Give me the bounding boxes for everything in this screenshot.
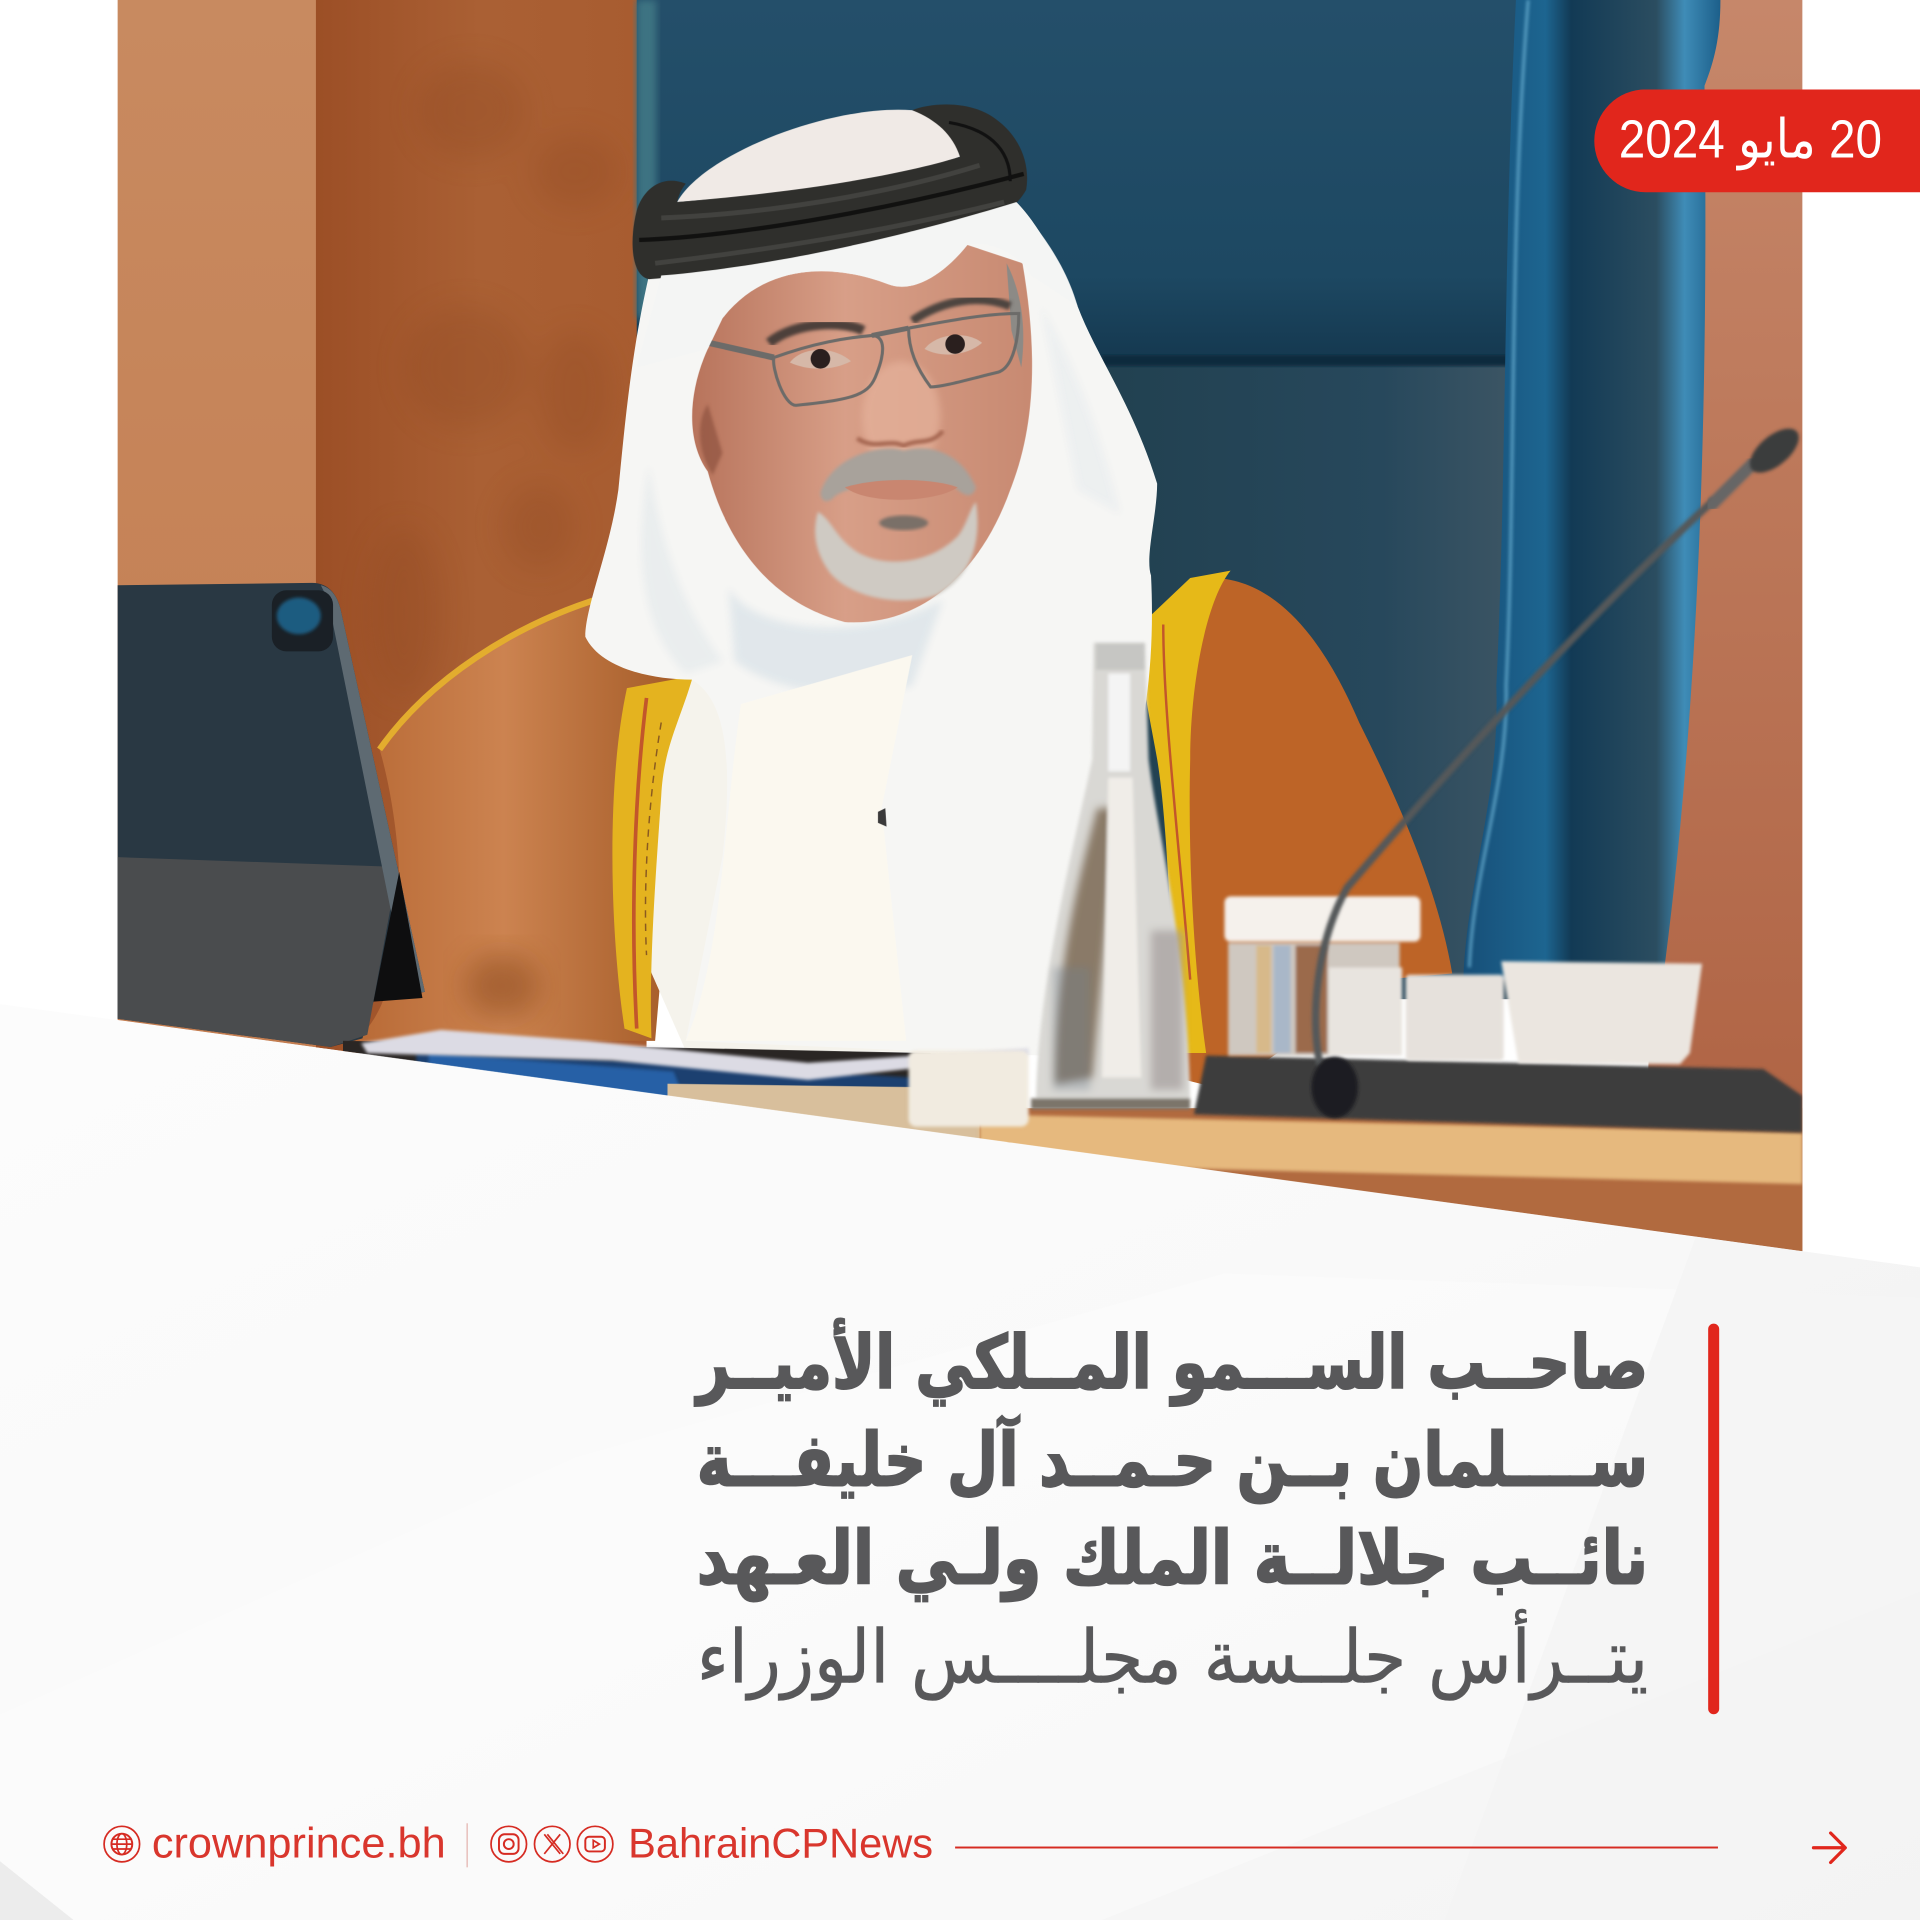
divider [467, 1823, 468, 1867]
chest fold mark [878, 808, 887, 827]
jar and cups [1224, 896, 1702, 1064]
gold trim right [1141, 571, 1231, 1053]
sound base of microphone [1194, 1056, 1802, 1133]
website: crownprince.bh [152, 1820, 446, 1868]
dark table surface under papers [343, 1041, 931, 1139]
tablet [118, 583, 425, 1047]
water bottle [1031, 643, 1190, 1109]
eyes and brows [769, 300, 1010, 369]
headline line 2: ســــلمان بــن حـمــد آل خليفـــة [697, 1414, 1648, 1503]
icon: youtube [577, 1826, 613, 1862]
robe: left shoulder [355, 595, 686, 1041]
red vertical accent bar [1708, 1324, 1719, 1714]
folded cloth on chest [790, 655, 912, 698]
wood wall left [118, 0, 647, 1053]
date badge [1594, 89, 1920, 192]
papers on table [361, 1030, 1029, 1139]
footer rule [955, 1847, 1718, 1848]
icon: instagram [491, 1826, 527, 1862]
lower white panel [0, 1004, 1920, 1920]
headline line 3: نائــب جلالــة الملك ولـي العـهد [697, 1516, 1648, 1602]
date text: 20 مايو 2024 [1619, 109, 1882, 170]
chair back [637, 0, 1720, 999]
right wall [1641, 0, 1802, 1261]
white glass on table [909, 1051, 1029, 1127]
headline line 1: صاحــب الســـمو المــلكي الأميــر [694, 1318, 1648, 1406]
beard and moustache [815, 448, 977, 600]
ghutra inner shadows [644, 344, 1112, 688]
forehead fold of ghutra [637, 202, 1078, 367]
face [692, 245, 1032, 622]
white thobe [651, 680, 914, 1052]
icon: globe [104, 1826, 140, 1862]
arrow [1813, 1833, 1845, 1862]
ghutra headscarf [585, 202, 1157, 1056]
table top [667, 1084, 1812, 1267]
microphone [1311, 420, 1806, 1118]
social handle: BahrainCPNews [628, 1820, 933, 1867]
icon: x [534, 1826, 570, 1862]
agal headband [633, 104, 1027, 279]
headline line 4: يتــرأس جلــسة مجلــــس الوزراء [697, 1608, 1648, 1700]
glasses [698, 313, 1019, 405]
robe: right shoulder [1176, 578, 1452, 1090]
gold trim left [612, 676, 693, 1038]
footer [104, 1820, 1845, 1868]
photo: prince seated at the cabinet table [118, 0, 1812, 1267]
headline block [694, 1318, 1648, 1700]
